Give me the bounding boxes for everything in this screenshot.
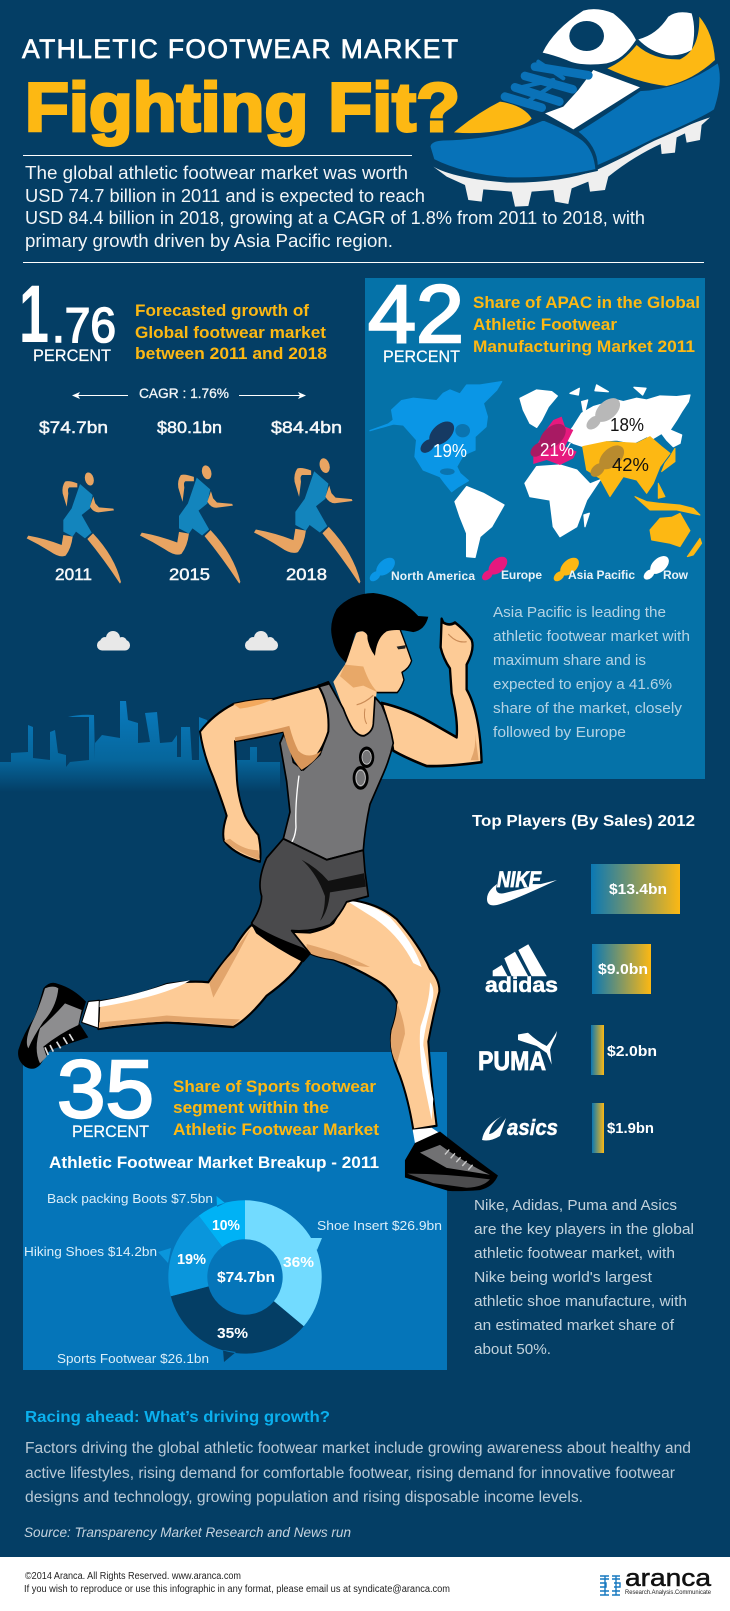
panel: APAC share: [365, 278, 705, 779]
bar: Nike sales: $13.4bn: [609, 882, 667, 898]
text: key players: athletic footwear market, with: [474, 1245, 675, 1262]
intro text: USD 74.7 billion in 2011 and is expected to reach: [25, 186, 425, 206]
text: growth factors: Factors driving the global athletic footwear market include growing awareness about healthy and: [25, 1440, 691, 1457]
text: growth factors: active lifestyles, rising demand for comfortable footwear, rising demand for innovative footwear: [25, 1465, 675, 1482]
donut segment labels: Hiking Shoes $14.2bn: [24, 1244, 157, 1259]
intro text: [25, 163, 645, 251]
map percentages: 19%: [433, 440, 467, 461]
map legend labels: Row: [663, 568, 689, 582]
text: Asia Pacific leading: followed by Europe: [493, 724, 626, 741]
map region: rest of world: [455, 385, 690, 557]
stat: 1.76 percent: [19, 269, 116, 365]
icon: top football boot: [429, 9, 721, 207]
map percentages: 18%: [610, 414, 644, 435]
text: source: Source: Transparency Market Research and News run: [24, 1524, 351, 1540]
text: key players: Nike, Adidas, Puma and Asics: [474, 1197, 677, 1214]
main runner illustration: [82, 593, 498, 1191]
heading: sports footwear share: Athletic Footwear Market: [173, 1121, 380, 1139]
segment: hiking shoes 19%: [158, 1216, 222, 1296]
year labels: 2011: [55, 565, 92, 584]
heading: APAC share: Athletic Footwear: [473, 315, 617, 334]
text: Asia Pacific leading: athletic footwear market with: [493, 628, 690, 645]
heading: sports footwear share: [173, 1078, 380, 1139]
segment: back packing boots 10%: [199, 1196, 245, 1247]
runner neck and face: [333, 629, 412, 736]
stat: 42 percent: 42: [368, 269, 464, 360]
donut segment labels: Back packing Boots $7.5bn: [47, 1191, 213, 1206]
runner back leg: [98, 925, 303, 1029]
text: key players: about 50%.: [474, 1341, 551, 1358]
heading: market breakup: Athletic Footwear Market Breakup - 2011: [49, 1154, 379, 1172]
map region: Asia Pacific: [583, 437, 702, 557]
bar: Nike sales: [591, 864, 680, 914]
legend icons: [368, 553, 672, 583]
donut percent labels: $74.7bn: [217, 1270, 275, 1286]
logo: Asics: asics: [507, 1115, 558, 1140]
market values: $74.7bn: [39, 418, 108, 437]
world map: [368, 382, 702, 583]
map legend labels: [391, 568, 689, 583]
heading: racing ahead: Racing ahead: What’s driving growth?: [25, 1409, 330, 1426]
bar: Asics sales: [592, 1103, 654, 1153]
title: Athletic Footwear Market: ATHLETIC FOOTWEAR MARKET: [22, 34, 458, 64]
runner front leg: [292, 900, 439, 1130]
title: Fighting Fit?: Fighting Fit?: [25, 69, 460, 146]
stat: 1.76 percent: .76: [52, 299, 116, 353]
runner ear: [355, 632, 367, 652]
text: Asia Pacific leading: maximum share and is: [493, 652, 646, 669]
stat: 35 percent: 35: [57, 1044, 154, 1135]
heading: forecasted growth: [135, 301, 327, 363]
bar: Puma sales: $2.0bn: [607, 1044, 657, 1060]
bar: Asics sales: $1.9bn: [607, 1121, 654, 1137]
donut percent labels: 36%: [283, 1255, 314, 1271]
donut segment labels: [24, 1191, 442, 1366]
map region: Europe: [533, 417, 577, 465]
stat: 1.76 percent: PERCENT: [33, 346, 111, 365]
heading: forecasted growth: Forecasted growth of: [135, 301, 309, 320]
map legend labels: North America: [391, 569, 475, 583]
logo: Puma: [478, 1031, 557, 1076]
text: key players: athletic shoe manufacture, with: [474, 1293, 687, 1310]
text: key players: are the key players in the global: [474, 1221, 694, 1238]
intro text: USD 84.4 billion in 2018, growing at a CAGR of 1.8% from 2011 to 2018, with: [25, 208, 645, 228]
stat: 35 percent: PERCENT: [72, 1122, 149, 1141]
footer band: [0, 1557, 730, 1611]
footer band: If you wish to reproduce or use this infographic in any format, please email us at syndicate@aranca.com: [24, 1584, 450, 1595]
donut percent labels: 19%: [177, 1252, 206, 1268]
map legend labels: Europe: [501, 568, 542, 582]
year labels: 2015: [169, 565, 210, 584]
logo: Aranca: [600, 1565, 712, 1596]
text: growth factors: designs and technology, growing population and rising disposable income levels.: [25, 1489, 583, 1506]
donut percent labels: 10%: [212, 1218, 240, 1234]
logo: Puma: PUMA: [478, 1046, 546, 1076]
intro text: primary growth driven by Asia Pacific region.: [25, 231, 393, 251]
logo: Aranca: Research.Analysis.Communicate: [625, 1590, 712, 1596]
icon: clouds: [97, 631, 278, 650]
text: Asia Pacific leading: expected to enjoy a 41.6%: [493, 676, 672, 693]
runner socks: [82, 1000, 440, 1145]
bar: Puma sales: [591, 1025, 657, 1075]
intro text: The global athletic footwear market was worth: [25, 163, 408, 183]
market values: $80.1bn: [157, 418, 222, 437]
divider under intro: [23, 262, 704, 263]
logo: Aranca: aranca: [625, 1565, 712, 1592]
logo: Adidas: adidas: [485, 974, 558, 997]
heading: forecasted growth: Global footwear market: [135, 323, 326, 342]
text: Asia Pacific leading: [493, 604, 690, 741]
bar: Adidas sales: $9.0bn: [598, 962, 648, 978]
map percentages: 42%: [612, 454, 649, 475]
heading: APAC share: Share of APAC in the Global: [473, 293, 700, 312]
runner front shoe: [405, 1132, 498, 1191]
runner shorts: [252, 839, 368, 961]
stat: 42 percent: PERCENT: [383, 347, 460, 366]
segment: sports footwear 35%: [171, 1286, 304, 1362]
stat: 1.76 percent: 1: [19, 269, 49, 360]
runner vest: [280, 682, 393, 860]
donut segment labels: Sports Footwear $26.1bn: [57, 1351, 209, 1366]
heading: APAC share: [473, 293, 700, 356]
bar: Adidas sales: [592, 944, 651, 994]
footer band: ©2014 Aranca. All Rights Reserved. www.aranca.com: [25, 1571, 241, 1582]
logo: Asics: [482, 1115, 558, 1140]
logo: Nike: [487, 867, 557, 905]
market values: $84.4bn: [271, 418, 342, 437]
skyline: [0, 701, 280, 792]
map percentages: 21%: [540, 439, 574, 460]
text: key players: [474, 1197, 694, 1358]
heading: sports footwear share: segment within the: [173, 1099, 329, 1117]
icon: three small runners: [27, 457, 360, 584]
text: key players: an estimated market share of: [474, 1317, 675, 1334]
heading: APAC share: Manufacturing Market 2011: [473, 337, 695, 356]
map region: North America: [370, 382, 502, 492]
donut percent labels: 35%: [217, 1326, 248, 1342]
year labels: 2018: [286, 565, 327, 584]
heading: forecasted growth: between 2011 and 2018: [135, 344, 327, 363]
map percentages: [433, 414, 649, 475]
runner hair: [331, 593, 428, 663]
shoe prints on map: [418, 393, 629, 480]
logo: Nike: NIKE: [497, 867, 542, 892]
segment: shoe insert 36%: [245, 1200, 322, 1326]
year labels: [55, 565, 327, 584]
heading: sports footwear share: Share of Sports footwear: [173, 1078, 377, 1096]
CAGR arrow label: CAGR : 1.76%: [139, 386, 229, 401]
text: growth factors: [25, 1440, 691, 1506]
donut segment labels: Shoe Insert $26.9bn: [317, 1218, 442, 1233]
runner far arm: [382, 619, 482, 766]
map legend labels: Asia Pacific: [568, 568, 635, 582]
heading: top players: Top Players (By Sales) 2012: [472, 813, 695, 830]
runner back shoe: [18, 983, 88, 1069]
runner near arm: [200, 684, 329, 862]
logo: Adidas: [485, 944, 558, 997]
CAGR arrow label: [72, 386, 306, 401]
divider under title: [23, 155, 412, 156]
panel: sports footwear share: [23, 1052, 447, 1370]
market values: [39, 418, 342, 437]
donut percent labels: [177, 1218, 314, 1342]
text: key players: Nike being world's largest: [474, 1269, 653, 1286]
donut chart: [158, 1196, 322, 1362]
text: Asia Pacific leading: Asia Pacific is leading the: [493, 604, 666, 621]
text: Asia Pacific leading: share of the market, closely: [493, 700, 683, 717]
